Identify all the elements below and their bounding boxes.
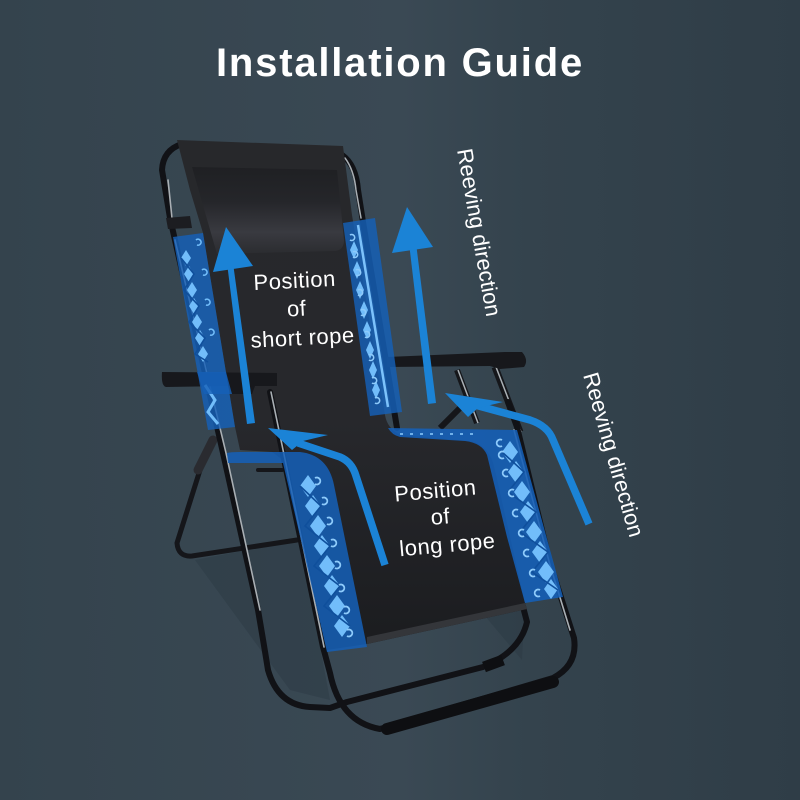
fabric bottom hem: [367, 603, 527, 644]
strap: [166, 216, 192, 229]
label: position of long rope: of: [430, 503, 451, 530]
fabric seat: [177, 140, 527, 650]
title: Installation Guide: [216, 41, 584, 85]
label: position of long rope: long rope: [398, 528, 496, 561]
label: position of short rope: short rope: [250, 322, 355, 353]
label: position of short rope: of: [286, 296, 307, 321]
arrow: short rope right: [392, 207, 436, 404]
floor shadow: [195, 540, 525, 700]
rear leg frame: [177, 440, 297, 556]
right arm supports: [440, 367, 521, 432]
blue strip: upper left: [173, 233, 235, 430]
arrow: long rope left: [268, 428, 385, 565]
label: position of short rope: [250, 266, 355, 353]
arm overlay band: [197, 372, 232, 394]
back frame tube: [162, 144, 527, 708]
foot grip: [387, 682, 553, 729]
arrow: short rope left: [213, 227, 255, 424]
rear crossbar grip: [484, 660, 503, 667]
front frame tube: [270, 392, 575, 729]
arrow: long rope right: [445, 393, 589, 524]
blue strip: lower right: [388, 428, 563, 603]
right armrest: [387, 352, 526, 369]
blue strip: upper right: [343, 218, 402, 416]
label: position of short rope: Position: [253, 266, 336, 295]
label: reeving direction lower: Reeving direction: [578, 369, 649, 540]
left armrest: [162, 372, 277, 394]
label: position of long rope: Position: [393, 474, 477, 507]
blue strip: lower left: [227, 452, 367, 652]
chair: [162, 140, 575, 729]
label: reeving direction upper: Reeving direction: [452, 147, 506, 318]
headrest: [192, 167, 344, 254]
label: position of long rope: [393, 474, 496, 561]
